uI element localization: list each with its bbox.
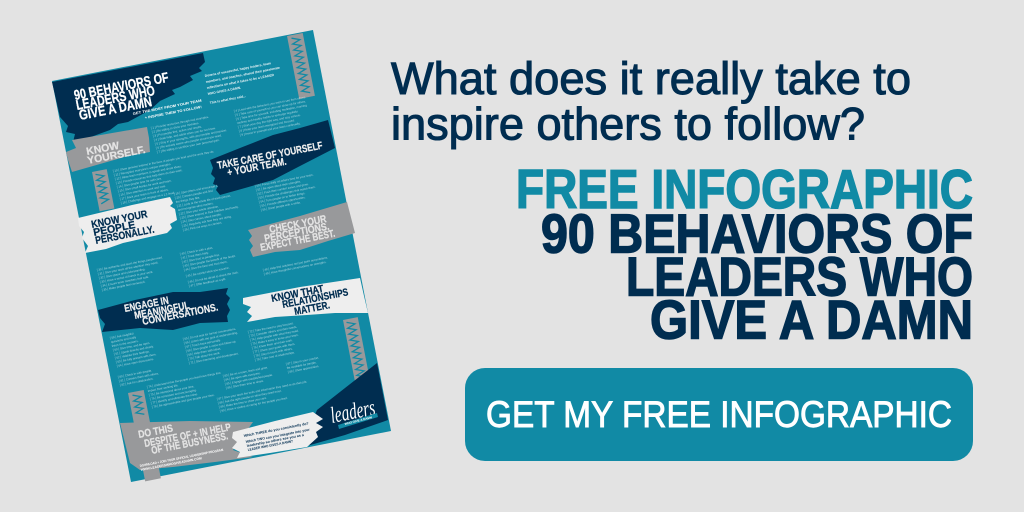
list: relationships bbox=[247, 321, 299, 362]
section heading: busyness: DO THIS bbox=[137, 422, 174, 441]
list: middle left: [ 33 ] Have a sense of humor in your work. bbox=[99, 270, 154, 284]
brush: know your people bbox=[78, 197, 177, 253]
list: engage left: [ 63 ] Be fully present with them. bbox=[115, 352, 157, 364]
list: do this despite left: [ 76 ] Be consistent and encouraging. bbox=[149, 388, 197, 401]
footer call to action: WWW.LEADERSWHOGIVEADAMN.COM bbox=[140, 456, 202, 472]
section heading: know yourself: KNOW bbox=[85, 140, 120, 158]
section heading: check your perceptions: EXPECT THE BEST. bbox=[259, 228, 336, 254]
section heading: check your perceptions bbox=[259, 213, 336, 254]
list: busyness right: Be available for people. bbox=[286, 360, 317, 370]
list: relationships: [ 72 ] Take the need to stay focused. bbox=[247, 321, 294, 334]
list: intro behaviors: [ 9 ] Invest in yourself and your team continually. bbox=[239, 121, 301, 137]
list: middle left: [ 34 ] Ensure team members feel safe. bbox=[100, 275, 149, 288]
brush: know that relationships bbox=[243, 278, 368, 322]
list: know your people: [ 19 ] Spot others and encourage it. bbox=[173, 183, 219, 196]
intro text: WHO GIVES A DAMN. bbox=[207, 86, 241, 96]
headline question: inspire others to follow? bbox=[391, 98, 865, 150]
list: intro behaviors: routines and healthy habits to recharge regularly. bbox=[236, 109, 299, 125]
reflection questions: LEADER WHO GIVES A DAMN? bbox=[247, 439, 293, 452]
list: do this despite left: impact their working life. bbox=[147, 383, 179, 393]
reflection questions: Which THREE do you consistently do? bbox=[243, 421, 309, 438]
heading: poster title bbox=[73, 69, 170, 123]
section heading: relationships: KNOW THAT bbox=[270, 283, 325, 305]
list: middle centre: [ 42 ] Give trust to people first. bbox=[181, 253, 220, 264]
list: know your people: the things they like. bbox=[175, 195, 201, 204]
brush: title bbox=[52, 53, 205, 142]
list: relationships lower bbox=[117, 368, 159, 387]
brush: reflection questions bbox=[232, 412, 323, 458]
list: busyness centre: [ 84 ] Be open with everyone. bbox=[223, 371, 261, 382]
list: intro behaviors bbox=[233, 95, 307, 137]
list: intro behaviors: [ 6 ] Take time for yourself, including meditation, morning bbox=[235, 103, 307, 121]
section heading: busyness bbox=[137, 421, 232, 457]
section heading: engage: ENGAGE IN bbox=[123, 295, 170, 315]
list: relationships: [ 74 ] Help people with what they need. bbox=[249, 329, 299, 342]
list: engage left: questions and really bbox=[110, 335, 137, 344]
poster subtitle: GET THE MOST FROM YOUR TEAM bbox=[132, 99, 202, 116]
section heading: engage: CONVERSATIONS. bbox=[141, 301, 219, 328]
list: take care of your team: [ 15 ] Give small thanks for work and team. bbox=[117, 179, 172, 193]
list: engage centre: [ 65 ] Do not wait for formal conversations. bbox=[182, 327, 237, 341]
list: do this despite right: [ 87 ] Give your team the tools and information they need to do their job. bbox=[216, 379, 308, 401]
list: do this despite left bbox=[146, 371, 221, 409]
heading: 90 behaviors: GIVE A DAMN bbox=[650, 288, 973, 350]
list: engage centre bbox=[182, 327, 239, 365]
brush: check your perceptions bbox=[248, 202, 355, 257]
list: know your people: [ 22 ] Give your whole attention. bbox=[178, 204, 219, 216]
list: take care of your team: [ 12 ] Allow team members to speak and share ideas. bbox=[114, 164, 182, 181]
heading: poster title: 90 BEHAVIORS OF bbox=[73, 69, 170, 103]
list: relationships: [ 79 ] Take care of relationships. bbox=[254, 350, 295, 362]
list: engage left: [ 59 ] Ask insightful bbox=[109, 331, 134, 340]
list: busyness right: [ 87 ] Stay in your comfort. bbox=[285, 356, 320, 366]
heading: 90 behaviors: 90 BEHAVIORS OF bbox=[541, 202, 973, 264]
list: engage left: [ 62 ] Validate their feelings. bbox=[114, 349, 150, 360]
intro text bbox=[204, 61, 280, 105]
button: get my free infographic bbox=[465, 368, 973, 461]
list: check your perceptions: [ 51 ] Be open about their strengths. bbox=[255, 179, 301, 192]
list: middle right: [ 48 ] Help find solutions not just point out problems. bbox=[262, 255, 329, 272]
list: check your perceptions: [ 55 ] Provide different opportunities. bbox=[259, 195, 306, 208]
section heading: check your perceptions: CHECK YOUR bbox=[268, 213, 328, 236]
list: know your people: [ 23 ] Show interest in their hobbies and family. bbox=[179, 205, 239, 220]
ladder decoration: top right bbox=[287, 33, 315, 99]
list: busyness right bbox=[285, 356, 320, 374]
list: do this despite left: [ 78 ] Be approachable and give people your time. bbox=[151, 393, 215, 409]
list: middle centre: [ 45 ] Be careful what you assume. bbox=[185, 266, 230, 278]
brush: engage bbox=[98, 288, 230, 332]
brush: know yourself bbox=[66, 127, 150, 172]
list: middle centre: [ 41 ] Treat them fairly. bbox=[180, 251, 209, 260]
list: middle centre: [ 40 ] Check in with a plan. bbox=[179, 246, 214, 256]
list: engage centre: [ 70 ] Talk about the work. bbox=[187, 351, 221, 361]
section heading: know your people: PERSONALLY. bbox=[94, 224, 156, 247]
section heading: know your people: PEOPLE bbox=[92, 219, 136, 239]
list: middle left bbox=[96, 255, 163, 292]
poster subtitle: + INSPIRE THEM TO FOLLOW! bbox=[144, 105, 202, 120]
list: take care of your team: [ 16 ] Give attention to work and care. bbox=[118, 184, 167, 197]
list: intro behaviors: [ 7 ] Start your day the right way, and stay curious. bbox=[237, 113, 301, 129]
list: engage left bbox=[109, 331, 157, 368]
intro text: members, and coaches, shared their passionate bbox=[205, 66, 280, 84]
list: middle left: [ 35 ] Make people feel connected. bbox=[101, 280, 146, 292]
brush: do this despite bbox=[120, 421, 253, 470]
list: busyness right: [ 88 ] Show appreciation. bbox=[287, 364, 320, 374]
list: know your people: [ 26 ] Find out ways to connect. bbox=[182, 220, 223, 232]
list: take care of your team bbox=[112, 149, 215, 205]
list: do this despite left: [ 75 ] Be intentional about your time. bbox=[148, 384, 195, 397]
list: know yourself: [ 3 ] Put people first, action and results. bbox=[152, 124, 202, 138]
list: intro behaviors: [ 4 ] Lead with the behaviors you want to see from others. bbox=[233, 95, 306, 113]
section heading: busyness: OF THE BUSYNESS. bbox=[150, 430, 229, 457]
section heading: know your people: KNOW YOUR bbox=[90, 208, 149, 231]
list: relationships lower: [ 81 ] Connect them with others. bbox=[118, 371, 159, 383]
list: know yourself: [ 6 ] Be actively aware who people around you need. bbox=[155, 133, 222, 150]
footer call to action bbox=[139, 448, 224, 472]
intro text: Dozens of successful, happy leaders, team bbox=[204, 61, 271, 78]
list: take care of your team: [ 18 ] Challenge and engage on a 1:1 level. bbox=[120, 190, 175, 205]
section heading: check your perceptions: PERCEPTIONS. bbox=[263, 221, 330, 245]
list: know yourself: [ 1 ] Provide resources through real examples. bbox=[150, 115, 209, 130]
section heading: know yourself: YOURSELF. bbox=[86, 144, 146, 167]
list: know your people: [ 25 ] Regularly ask how they are doing. bbox=[181, 214, 232, 228]
list: relationships: [ 77 ] Share your goals with them. bbox=[252, 342, 296, 354]
list: engage centre: [ 68 ] Give people a voice and follow up. bbox=[185, 339, 237, 353]
reflection questions: Which TWO can you integrate into your bbox=[245, 428, 311, 444]
intro text: This is what they said... bbox=[209, 94, 246, 105]
ladder decoration: right bbox=[343, 317, 370, 385]
intro text: reflections on what it takes to be a LEADER bbox=[206, 73, 275, 90]
list: engage left: [ 61 ] Speak directly and clearly. bbox=[113, 344, 154, 356]
list: know your people bbox=[173, 183, 239, 232]
list: middle right: [ 49 ] Have thoughtful conversations on strengths. bbox=[263, 260, 327, 276]
list: relationships: [ 76 ] Know them and their work. bbox=[251, 338, 293, 350]
list: busyness centre: [ 83 ] Be on a team, learn and grow. bbox=[222, 365, 268, 378]
list: do this despite left: [ 77 ] Identify and eliminate the noise. bbox=[150, 392, 198, 405]
logo: leaders: WHO GIVE A DAMN bbox=[344, 415, 372, 426]
section heading: relationships bbox=[270, 283, 349, 318]
section heading: know your people bbox=[90, 208, 156, 247]
list: relationships: [ 73 ] Consider others and their needs. bbox=[248, 325, 298, 338]
heading: poster title: GIVE A DAMN bbox=[78, 93, 153, 123]
list: engage centre: [ 67 ] Touch base personally. bbox=[184, 338, 221, 349]
list: middle centre: [ 47 ] Offer feedback as a gift. bbox=[188, 277, 227, 288]
list: check your perceptions: [ 50 ] Focus daily on what's best for your team. bbox=[254, 173, 314, 188]
list: know your people: [ 24 ] Stay curious about people. bbox=[180, 212, 222, 224]
list: relationships lower: [ 80 ] Check in with people. bbox=[117, 368, 152, 379]
list: engage centre: [ 69 ] Help them with ideas. bbox=[186, 346, 222, 357]
list: intro behaviors: [ 5 ] Take care of yourself so you can show up for others. bbox=[234, 99, 306, 117]
list: do this despite right: [ 89 ] Make the time to show you care. bbox=[218, 396, 267, 409]
list: intro behaviors: [ 8 ] Keep your team energized and focused. bbox=[238, 118, 295, 133]
heading: poster title: LEADERS WHO bbox=[75, 82, 156, 113]
section heading: engage bbox=[123, 295, 219, 328]
section heading: relationships: RELATIONSHIPS bbox=[281, 286, 349, 311]
brush: take care bbox=[210, 120, 335, 195]
headline question bbox=[391, 53, 911, 150]
list: middle centre: [ 44 ] Give the best and trust them. bbox=[183, 260, 228, 272]
list: do this despite right: [ 90 ] Have a routine of caring for the people you lead. bbox=[219, 396, 288, 413]
list: know yourself: [ 7 ] Be willing to sacrifice your own personal gain. bbox=[156, 138, 220, 154]
list: middle centre: [ 43 ] Give people the benefit of the doubt. bbox=[182, 254, 236, 268]
section heading: relationships: MATTER. bbox=[293, 299, 331, 318]
list: take care of your team: [ 11 ] Recognize everyone's unique strengths. bbox=[113, 162, 172, 177]
footer call to action: DOWNLOAD + JOIN YOUR OFFICIAL LEADERSHIP PROGRAM bbox=[139, 448, 224, 468]
list: busyness centre bbox=[222, 365, 273, 390]
logo: leaders: leaders bbox=[328, 395, 377, 428]
list: relationships: [ 78 ] Stay in touch with others. bbox=[253, 346, 293, 358]
list: middle left: [ 30 ] Be authentic and learn the things people need. bbox=[96, 255, 163, 272]
section heading: take care: TAKE CARE OF YOURSELF bbox=[216, 140, 324, 172]
list: busyness centre: [ 85 ] Engage with established people. bbox=[224, 373, 273, 386]
list: relationships: [ 75 ] Make it easy to know your team. bbox=[250, 333, 299, 346]
list: engage centre: [ 66 ] Listen with the goal of understanding. bbox=[183, 331, 238, 345]
list: check your perceptions: [ 56 ] Greet people with a smile. bbox=[260, 200, 301, 212]
ladder decoration: bottom left bbox=[128, 390, 161, 481]
list: busyness centre: [ 86 ] Give them time to share. bbox=[225, 379, 264, 390]
navy corner bbox=[300, 363, 388, 448]
button: get my free infographic: GET MY FREE INFOGRAPHIC bbox=[486, 394, 952, 435]
section heading: busyness: DESPITE OF + IN HELP bbox=[143, 421, 232, 450]
list: know yourself: [ 4 ] Seek help, and admit when you do not know. bbox=[153, 126, 216, 142]
list: relationships lower: [ 82 ] Ask for collaboration. bbox=[119, 377, 154, 387]
list: engage centre: [ 71 ] Give mentoring and development. bbox=[188, 351, 239, 365]
list: do this despite left: [ 74 ] Understand that the people you lead have things that bbox=[146, 371, 221, 389]
ladder decoration: left bbox=[92, 169, 114, 211]
section heading: take care: + YOUR TEAM. bbox=[226, 156, 288, 179]
list: take care of your team: [ 17 ] Back your team in front of others. bbox=[119, 188, 169, 201]
list: do this despite right bbox=[216, 379, 308, 413]
reflection questions: leadership so others see you as a bbox=[246, 433, 304, 448]
list: know yourself bbox=[150, 115, 227, 154]
list: know yourself: [ 5 ] Stay in your strengths, with your people and passion. bbox=[154, 128, 227, 146]
list: take care of your team: [ 14 ] Give people time for self-care. bbox=[116, 176, 162, 189]
list: check your perceptions: [ 54 ] Turn people on to better things. bbox=[258, 191, 306, 204]
section heading: take care bbox=[216, 140, 324, 179]
list: check your perceptions: [ 52 ] Push their comfort zones and grow. bbox=[256, 182, 309, 196]
list: middle centre bbox=[179, 246, 239, 288]
list: take care of your team: [ 10 ] Show genuine interest in the lives of people you lead and the work they do. bbox=[112, 149, 215, 173]
list: engage left: [ 64 ] Have open discussions. bbox=[116, 357, 154, 368]
poster sheet bbox=[52, 30, 391, 482]
list: know yourself: [ 2 ] Be willing to show your mistakes. bbox=[151, 121, 200, 134]
list: engage left: listen to the answers. bbox=[111, 339, 139, 348]
logo: leaders bbox=[328, 395, 378, 429]
list: take care of your team: [ 13 ] Provide resources that help them do their work. bbox=[115, 168, 183, 185]
list: middle centre: [ 46 ] Do not be afraid to check the truth. bbox=[187, 270, 239, 284]
list: know your people: [ 21 ] Look at the whole life of each person. bbox=[176, 194, 231, 208]
list: know your people: and recognize what matters. bbox=[177, 201, 214, 212]
panel: rotated infographic poster bbox=[52, 30, 391, 482]
list: middle left: [ 32 ] Give space and understanding. bbox=[98, 267, 146, 280]
list: check your perceptions: [ 53 ] Provide the challenges that match them. bbox=[257, 185, 316, 200]
poster subtitle bbox=[132, 99, 202, 120]
list: middle left: [ 31 ] Give your team all the attention they need. bbox=[97, 260, 159, 276]
list: do this despite right: [ 88 ] Ask the right people on what they need most. bbox=[217, 389, 282, 405]
list: check your perceptions bbox=[254, 173, 316, 212]
reflection questions bbox=[243, 421, 311, 452]
heading: 90 behaviors bbox=[541, 202, 973, 350]
section heading: engage: MEANINGFUL bbox=[133, 299, 191, 322]
list: engage left: [ 60 ] Give time, and be open. bbox=[112, 341, 151, 352]
headline question: What does it really take to bbox=[391, 53, 911, 104]
list: know your people: [ 20 ] Connect people and find bbox=[174, 189, 213, 200]
